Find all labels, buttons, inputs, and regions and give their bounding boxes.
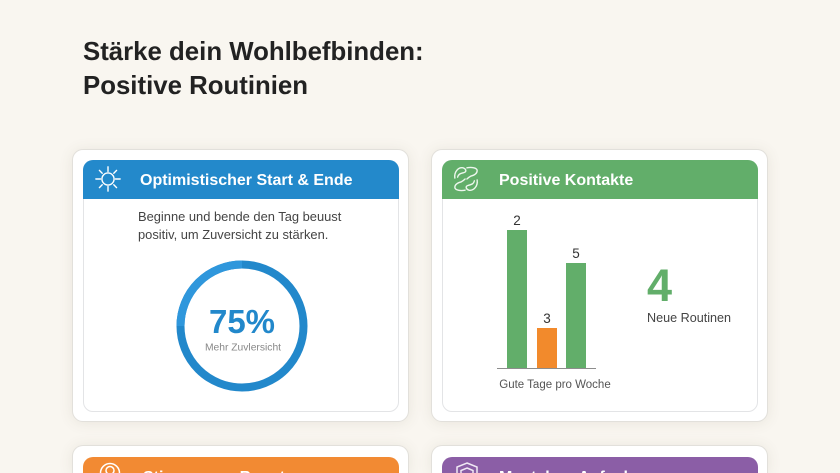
panel: optimistischer Start und Ende — [72, 149, 409, 422]
icon: shield — [456, 462, 478, 473]
bar chart: gute Tage pro Woche: 5 — [572, 246, 580, 261]
stat number: 4 — [647, 260, 672, 311]
heading: positive Kontakte: Positive Kontakte — [499, 172, 633, 189]
header: Stimmungs-Boost — [83, 457, 399, 473]
title — [83, 38, 424, 100]
panel: mentale Aufgaben — [431, 445, 768, 473]
description text: Beginne und bende den Tag beuust — [138, 209, 341, 224]
donut chart: 75 percent: 75% — [209, 303, 275, 340]
stat: 4 neue Routinen — [647, 260, 731, 325]
bar chart: gute Tage pro Woche: 3 — [543, 311, 551, 326]
header: mentale Aufgaben — [442, 457, 758, 473]
description text: positiv, um Zuversicht zu stärken. — [138, 226, 328, 242]
donut chart: 75 percent — [176, 260, 308, 392]
stat label: Neue Routinen — [647, 311, 731, 325]
panel: positive Kontakte — [431, 149, 768, 422]
header: positive Kontakte — [442, 160, 758, 199]
donut chart: 75 percent: Mehr Zuvlersicht — [205, 342, 281, 354]
description text — [138, 209, 342, 242]
title: Stärke dein Wohlbefbinden: — [83, 38, 424, 66]
heading: optimistischer Start und Ende: Optimistischer Start & Ende — [140, 172, 352, 189]
icon: interlinked swirl — [454, 166, 478, 192]
bar chart: gute Tage pro Woche — [497, 213, 611, 391]
icon: sun — [95, 166, 121, 192]
bar chart: gute Tage pro Woche: 2 — [513, 213, 521, 228]
title: Positive Routinien — [83, 72, 308, 100]
panel: Stimmungs-Boost — [72, 445, 409, 473]
header: optimistischer Start und Ende — [83, 160, 399, 199]
bar chart: gute Tage pro Woche: Gute Tage pro Woche — [499, 379, 611, 391]
icon: target — [100, 462, 120, 473]
